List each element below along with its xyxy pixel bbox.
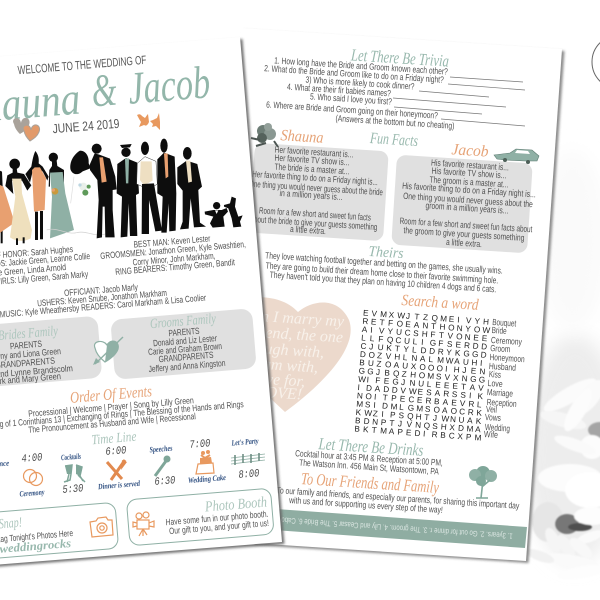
word search grid: IDADDVWESARSSIK — [357, 383, 484, 401]
groom — [90, 144, 117, 238]
groomsman with orange tie — [157, 139, 176, 233]
panel: Jacob fun facts — [391, 155, 536, 253]
word search grid: NOITPECERBAEVRL — [357, 391, 482, 409]
heart with vow text: live for, — [257, 370, 306, 390]
icon: tree — [469, 466, 497, 498]
logo circle, top right — [592, 35, 600, 89]
panel: Shauna fun facts — [249, 143, 389, 241]
panel: Shauna fun facts: Her favorite restaurant is... — [274, 144, 354, 160]
groomsman with cream tie — [177, 147, 206, 229]
word list: Wedding — [485, 422, 510, 434]
panel: photo booth: Our gift to you, and your gift to us! — [169, 518, 269, 536]
icon: bouquet — [251, 123, 278, 147]
panel: photo booth — [126, 488, 274, 546]
thank you text: To our family and friends, and especially our parents, for sharing this important day — [276, 485, 520, 511]
panel: Jacob fun facts: Room for a few short and sweet fun facts about — [399, 216, 533, 234]
Theirs text: They love watching football together and betting on the games, she usually wins. — [265, 250, 503, 276]
word list: Husband — [489, 361, 516, 373]
panel: grooms family: Carie and Graham Brown — [148, 341, 222, 357]
Shauna heading: Shauna — [280, 127, 324, 147]
timeline: speeches — [149, 444, 176, 489]
word search grid: EVMXWJTZQMEIVYH — [363, 309, 489, 327]
word list: Reception — [486, 397, 517, 409]
officiant, ushers, music — [0, 282, 207, 319]
timeline: party: 8:00 — [238, 468, 260, 482]
icon: orange doves — [137, 113, 160, 130]
bride — [47, 151, 107, 235]
order of events text: Processional | Welcome | Prayer | Song by Lilly Green — [28, 395, 194, 419]
To Our Friends and Family heading: To Our Friends and Family — [301, 469, 440, 497]
panel: Shauna fun facts: Her favorite TV show is... — [274, 153, 350, 167]
word search grid: MSIDMLGMSOAOCRK — [356, 400, 483, 418]
officiant, ushers, music: MUSIC: Kyle Wheathersby READERS: Carol Markham & Lisa Coolier — [0, 293, 207, 319]
reception details: Cocktail hour at 3:45 PM & Reception at 5:00 PM, — [295, 448, 443, 468]
panel: photo booth: Photo Booth — [204, 494, 268, 516]
trivia questions: 3) Who is more likely to cook dinner? — [305, 74, 415, 92]
heart with vow text — [220, 297, 351, 412]
word list — [484, 317, 525, 440]
word search grid: BKTMAPEDIRBCXPM — [354, 424, 482, 443]
panel: Shauna fun facts: in a million years is... — [279, 188, 343, 202]
word list: Kiss — [489, 369, 502, 380]
Order Of Events heading: Order Of Events — [69, 383, 153, 407]
word list: Bride — [491, 325, 507, 336]
timeline: speeches: 6:30 — [154, 475, 176, 489]
heart with vow text: I dream with, — [231, 354, 319, 376]
word search grid: CJUKTYLDDRYKGGD — [360, 342, 487, 360]
word list: Ceremony — [491, 335, 523, 347]
panel: brides family: PARENTS — [10, 339, 42, 351]
heart with vow text: Can I marry my — [242, 307, 345, 331]
timeline: speeches: Speeches — [149, 444, 173, 454]
word list: Honeymoon — [489, 352, 525, 364]
panel: grooms family: Grooms Family — [149, 312, 217, 332]
panel: Jacob fun facts: One thing you would never guess about the — [403, 191, 533, 209]
Fun Facts heading: Fun Facts — [369, 130, 418, 150]
panel: Jacob fun facts: the groom to give your guests something — [403, 225, 525, 243]
icon: camera — [90, 517, 113, 537]
trivia questions: 4. What are their fir babies names? — [287, 82, 391, 98]
panel: photo booth: Have some fun in our photo booth. — [165, 509, 269, 527]
word list: Wife — [484, 429, 498, 440]
heart with vow text: I laugh with, — [241, 339, 325, 361]
icon: two hearts — [13, 118, 40, 141]
trivia questions: 1. How long have the Bride and Groom known each other? — [274, 55, 448, 77]
answers band — [260, 508, 527, 548]
word search grid — [354, 309, 491, 443]
timeline: dinner: Dinner is served — [97, 479, 141, 491]
panel: grooms family: GRANDPARENTS — [158, 350, 214, 364]
order of events text — [0, 395, 244, 435]
timeline: cocktails — [61, 452, 85, 497]
icon: video camera — [133, 512, 154, 536]
heart with vow text: LOVE! — [255, 384, 303, 403]
word search grid: AIVYUCSHFTVONEE — [361, 325, 488, 343]
Search a word heading: Search a word — [401, 292, 480, 314]
reception details: The Watson Inn. 456 Main St, Watsontown, PA — [299, 457, 439, 477]
title: couple names: Jacob — [126, 56, 212, 114]
title: couple names — [0, 56, 212, 133]
timeline: ceremony: 4:00 — [21, 452, 43, 466]
panel: Jacob fun facts: a little extra. — [446, 237, 482, 249]
panel: Shauna fun facts: The bride is a master at... — [274, 162, 350, 176]
background: white flowers — [524, 150, 600, 582]
panel: Shauna fun facts: about the bride to give your guests something — [250, 214, 378, 232]
trivia questions: 2. What do the Bride and Groom like to do on a Friday night? — [264, 63, 444, 85]
panel: Shauna fun facts: Room for a few short and sweet fun facts — [259, 205, 372, 223]
best man and groomsmen: RING BEARERS: Timothy Green, Bandit — [115, 257, 236, 277]
icon: heart with arrow — [93, 337, 123, 365]
word list: Veil — [486, 404, 497, 415]
word search grid: LLFQCULIGFSERDD — [361, 333, 488, 352]
panel: Shauna fun facts: One thing you would never guess about the bride — [249, 179, 383, 197]
Time Line heading: Time Line — [91, 430, 137, 448]
wedding party silhouettes — [0, 139, 243, 245]
panel: Jacob fun facts: groom in a million years is... — [425, 200, 509, 216]
best man and groomsmen: Corry Minor, John Markham, — [132, 251, 216, 267]
word list: Bouquet — [492, 317, 517, 329]
Jacob heading: Jacob — [451, 141, 489, 161]
word list: Groom — [490, 343, 511, 354]
bridal party women — [0, 151, 74, 245]
timeline: cake: Wedding Cake — [188, 473, 227, 485]
thank you text: with us and for supporting us every step of the way! — [288, 495, 443, 515]
Theirs text — [265, 250, 503, 294]
answers band: 1. 3years. 2. Go out for dinne r. 3. The groom. 4. Lily and Ceasar 5. The Bride 6. Cabo — [281, 515, 513, 541]
groomsman in cap — [117, 144, 139, 237]
word search grid: GGJBQZHOMSVXNGG — [358, 366, 486, 385]
word list: Marriage — [487, 387, 513, 399]
word search grid: RETFOEANTHONYOW — [362, 317, 491, 335]
officiant, ushers, music: USHERS: Keven Snube, Jonathon Markham — [37, 288, 167, 308]
title: couple names: & — [89, 64, 119, 116]
panel: grooms family: PARENTS — [168, 326, 200, 338]
word search grid: DOZVHLNALMWAUHI — [360, 350, 483, 368]
Theirs text: They are going to build their dream home close to their favorite swimming hole. — [265, 260, 499, 286]
left card: welcome program — [0, 37, 285, 568]
timeline: party — [230, 436, 265, 482]
officiant, ushers, music: OFFICIANT: Jacob Marly — [64, 282, 139, 298]
panel: grooms family: Jeffery and Anna Kingston — [148, 358, 226, 374]
timeline: ceremony — [19, 452, 45, 499]
word search grid: BDNPTJVNQSHXDMA — [355, 416, 481, 434]
timeline: dinner — [97, 445, 141, 491]
timeline: dinner: 6:00 — [105, 445, 127, 459]
trivia questions — [264, 55, 525, 131]
groomsman in vest — [137, 142, 162, 234]
ring bearer and dog — [205, 197, 243, 228]
best man and groomsmen — [100, 233, 246, 277]
panel: Shauna fun facts: a little extra. — [290, 224, 326, 236]
reception details — [295, 448, 443, 477]
trivia questions: (Answers at the bottom but no cheating) — [335, 113, 455, 131]
word list: Love — [487, 378, 503, 389]
timeline: cake: 7:00 — [189, 438, 211, 452]
date: JUNE 24 2019 — [52, 116, 120, 136]
panel: brides family — [0, 316, 102, 388]
timeline: ceremony: Ceremony — [19, 487, 45, 499]
icon: vintage car — [494, 149, 539, 164]
trivia questions: 6. Where are Bride and Groom going on their honeymoon? — [266, 99, 438, 121]
word search grid: WIFEGJNULEEETAV — [358, 375, 485, 393]
panel: Jacob fun facts: His favorite restaurant is... — [431, 157, 509, 173]
panel: snap hashtag — [0, 502, 119, 560]
Theirs heading: Theirs — [368, 244, 404, 262]
welcome line: WELCOME TO THE WEDDING OF — [17, 53, 147, 77]
panel: Jacob fun facts: His favorite TV show is... — [431, 166, 507, 180]
panel: grooms family: Donald and Liz Lester — [153, 333, 217, 348]
best man and groomsmen: GROOMSMEN: Jonathon Green, Kyle Swashtien, — [100, 239, 246, 261]
panel: Jacob fun facts: His favorite thing to do on a Friday night is... — [402, 181, 536, 199]
timeline: cocktails: Cocktails — [61, 452, 81, 462]
Let There Be Drinks heading: Let There Be Drinks — [317, 434, 424, 460]
right card: trivia, fun facts and word search — [205, 28, 564, 563]
timeline: cake — [188, 438, 227, 485]
maid of honor and bridesmaids — [0, 244, 90, 289]
heart with vow text: best friend, the one — [220, 322, 344, 346]
panel: grooms family — [110, 308, 257, 380]
Theirs text: They haven't told you that they plan on having 10 children 4 dogs and 6 cats. — [269, 270, 497, 294]
trivia heading: Let There Be Trivia — [350, 45, 450, 71]
timeline: cocktails: 5:30 — [62, 483, 84, 497]
panel: Jacob fun facts: The groom is a master at... — [429, 174, 509, 190]
word search grid: KWZIPSQHTJWNUAK — [355, 408, 482, 426]
trivia questions: 5. Who said I love you first? — [310, 91, 392, 107]
timeline: party: Let's Party — [230, 436, 259, 448]
word search grid: BUZOAUXOOOIHJEN — [359, 358, 486, 376]
order of events text: The Pronouncement as Husband and Wife | Recessional — [28, 411, 196, 435]
word list: Vows — [485, 412, 502, 423]
panel: Shauna fun facts: Her favorite thing to do on a Friday night is... — [252, 169, 378, 187]
best man and groomsmen: BEST MAN: Keven Lester — [133, 233, 211, 250]
